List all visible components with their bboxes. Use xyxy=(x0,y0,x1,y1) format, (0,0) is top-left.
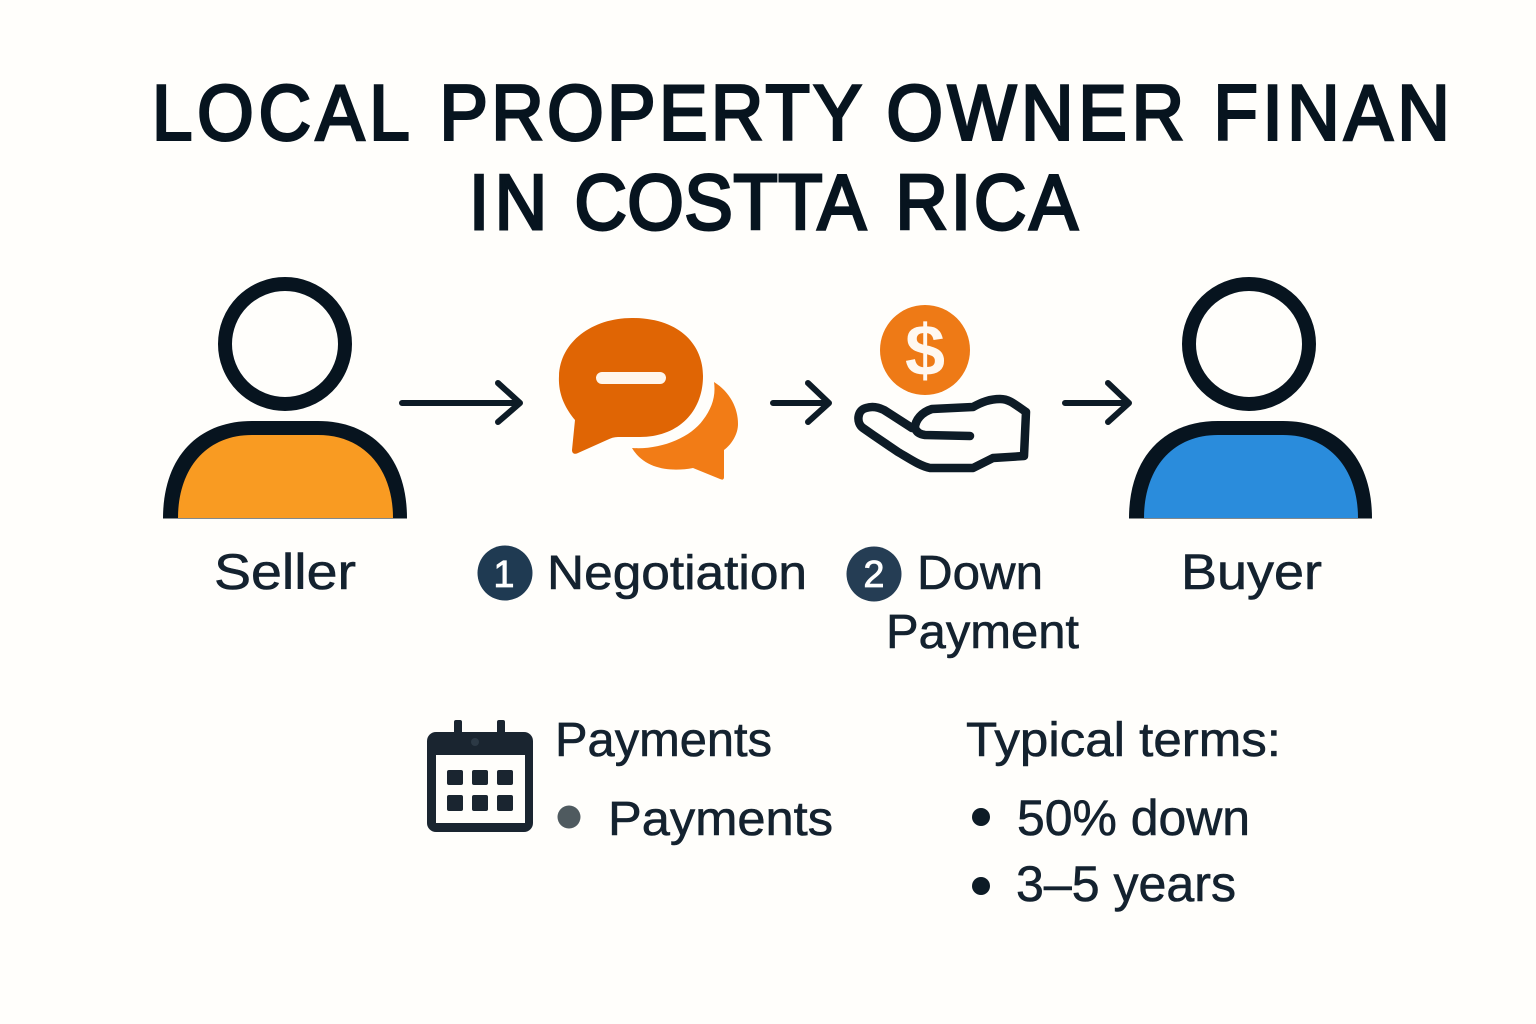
title: PROPERTY xyxy=(440,69,862,156)
step 2: down payment xyxy=(846,546,1079,659)
title: FINAN xyxy=(1214,69,1450,156)
arrow: negotiation to down payment xyxy=(773,383,829,422)
title: COSTTA xyxy=(574,159,867,246)
typical terms text block: 3–5 years xyxy=(1016,856,1236,912)
label: seller: Seller xyxy=(214,544,356,600)
typical terms text block: 50% down xyxy=(1017,790,1250,846)
payments text block xyxy=(555,714,833,846)
icon: hand with coin xyxy=(858,305,1026,468)
icon: chat bubbles xyxy=(559,318,738,480)
icon: calendar xyxy=(427,720,533,832)
title: IN xyxy=(469,159,547,246)
arrow: seller to negotiation xyxy=(402,383,520,422)
icon: hand with coin: $ xyxy=(905,311,945,391)
step 2: down payment: Payment xyxy=(886,606,1079,659)
title xyxy=(152,69,1450,246)
typical terms text block xyxy=(966,714,1281,912)
step 1: negotiation: Negotiation xyxy=(547,547,807,600)
title: LOCAL xyxy=(152,69,410,156)
step 2: down payment: 2 xyxy=(863,554,885,596)
icon: buyer xyxy=(1129,284,1372,518)
title: OWNER xyxy=(886,69,1184,156)
icon: seller xyxy=(163,284,407,518)
arrow: down payment to buyer xyxy=(1065,383,1129,422)
step 2: down payment: Down xyxy=(917,547,1043,600)
title: RICA xyxy=(896,159,1079,246)
payments text block: Payments xyxy=(555,714,772,767)
label: buyer: Buyer xyxy=(1181,544,1322,600)
typical terms text block: Typical terms: xyxy=(966,714,1281,767)
payments text block: Payments xyxy=(608,793,833,846)
step 1: negotiation: 1 xyxy=(493,554,515,596)
